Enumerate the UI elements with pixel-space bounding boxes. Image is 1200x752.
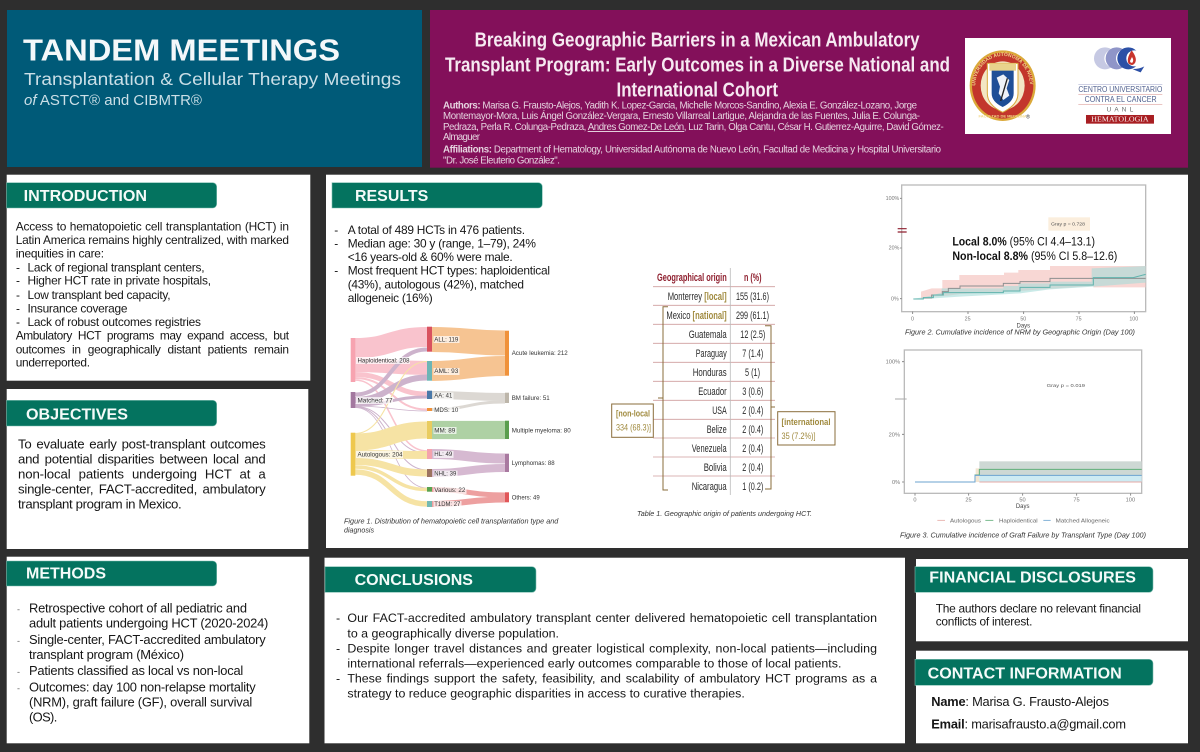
chart: figure 2 cumulative incidence of NRM: Figure 2. Cumulative incidence of NRM by Geographic Origin (Day 100) (905, 327, 1135, 336)
chart: figure 3 cumulative incidence of graft failure: 50 (1019, 498, 1026, 504)
heading: methods (6, 561, 217, 586)
table: geographic origin: 7 (1.4) (742, 348, 763, 360)
text: introduction body: inequities in care: (16, 247, 104, 261)
title: International Cohort (616, 80, 778, 102)
table: geographic origin: Paraguay (696, 348, 727, 360)
subheading: societies: of ASTCT® and CIBMTR® (24, 93, 202, 109)
callout: non-local bracket: [non-local (616, 409, 650, 420)
text: methods list: - (17, 683, 20, 693)
chart: sankey of transplant type and diagnosis: AML: 93 (434, 368, 459, 375)
text: methods list: - (17, 636, 20, 646)
table: geographic origin: Mexico [national] (666, 310, 727, 322)
panel: financial disclosures (915, 559, 1188, 641)
affiliations: Affiliations: Department of Hematology, Universidad Autónoma de Nuevo León, Facultad de Medicina y Hospital Universitario (443, 145, 941, 156)
icon: cancer center logo: HEMATOLOGIA (1091, 115, 1149, 124)
icon: university seal: UNIVERSIDAD AUTÓNOMA DE NUEVO LEÓN (972, 52, 1034, 86)
text: introduction body: Latin America remains highly centralized, with marked (16, 233, 289, 247)
legend: transplant type (937, 518, 1110, 524)
heading: conclusions (325, 567, 536, 592)
text: conclusions list (336, 611, 877, 700)
chart: figure 2 cumulative incidence of NRM: Local 8.0% (95% CI 4.4–13.1) (952, 235, 1095, 249)
text: conclusions list: to a geographically diverse population. (347, 627, 559, 641)
text: methods list: (NRM), graft failure (GF), overall survival (29, 695, 252, 710)
chart: sankey of transplant type and diagnosis: AA: 41 (434, 392, 453, 400)
icon: university seal: ® (1026, 113, 1030, 120)
authors (443, 100, 944, 143)
chart: sankey of transplant type and diagnosis (351, 327, 571, 508)
text: introduction body: Access to hematopoietic cell transplantation (HCT) in (16, 220, 289, 234)
panel: title and authors (430, 10, 1188, 168)
chart: figure 3 cumulative incidence of graft failure: Days (1016, 504, 1029, 510)
text: results summary: - (334, 236, 338, 250)
text: results summary: Median age: 30 y (range, 1–79), 24% (348, 236, 536, 250)
table: geographic origin: 1 (0.2) (742, 481, 763, 493)
chart: figure 3 cumulative incidence of graft failure: 100% (886, 360, 900, 366)
text: introduction body: - (16, 301, 20, 315)
callout: international bracket (765, 326, 835, 489)
chart: figure 3 cumulative incidence of graft failure (886, 350, 1146, 539)
affiliations: "Dr. José Eleuterio González". (443, 155, 560, 166)
text: contact details: Email: marisafrausto.a@gmail.com (931, 716, 1126, 731)
table: geographic origin: Bolivia (704, 462, 727, 474)
text: introduction body: Lack of robust outcomes registries (28, 315, 201, 329)
chart: sankey of transplant type and diagnosis: T1DM: 27 (434, 501, 461, 508)
heading: contact information: CONTACT INFORMATION (928, 665, 1122, 682)
chart: figure 2 cumulative incidence of NRM: Gray p = 0.728 (1051, 222, 1085, 227)
chart: sankey of transplant type and diagnosis: Autologous: 204 (358, 451, 403, 458)
panel: introduction (6, 175, 310, 381)
chart: figure 2 cumulative incidence of NRM: 50 (1020, 317, 1026, 323)
callout: international bracket: [international (782, 417, 830, 428)
title: Breaking Geographic Barriers in a Mexican Ambulatory (475, 30, 920, 52)
panel: results (326, 175, 1188, 548)
chart: sankey of transplant type and diagnosis: Others: 49 (512, 495, 540, 502)
text: introduction body: outcomes in geographically distant patients remain (16, 342, 289, 356)
text: methods list: Patients classified as local vs non-local (29, 663, 243, 678)
authors: Pedraza, Perla R. Colunga-Pedraza, Andres Gomez-De León, Luz Tarin, Olga Cantu, César H. Gutierrez-Aguirre, David Gómez- (443, 122, 944, 133)
chart: figure 2 cumulative incidence of NRM: Days (1017, 323, 1030, 329)
callout: non-local bracket: 334 (68.3)] (616, 423, 651, 434)
chart: sankey of transplant type and diagnosis: Multiple myeloma: 80 (512, 427, 571, 434)
text: contact details (931, 694, 1126, 731)
chart: sankey of transplant type and diagnosis: Matched: 77 (358, 397, 393, 404)
authors: Authors: Marisa G. Frausto-Alejos, Yadith K. Lopez-Garcia, Michelle Morcos-Sandino, Alexia E. González-Lozano, Jorge (443, 100, 917, 111)
heading: financial disclosures (915, 567, 1153, 592)
text: conclusions list: strategy to reduce geographic disparities in access to curative therapies. (347, 686, 745, 700)
subheading: meetings name: Transplantation & Cellular Therapy Meetings (24, 69, 401, 89)
text: methods list: transplant program (México) (29, 647, 184, 662)
affiliations (443, 145, 941, 166)
panel: objectives (6, 389, 308, 549)
text: introduction body (16, 220, 290, 370)
chart: figure 3 cumulative incidence of graft failure: 0% (892, 480, 900, 486)
text: objectives body: To evaluate early post-transplant outcomes (18, 437, 266, 452)
chart: figure 2 cumulative incidence of NRM: 75 (1076, 317, 1082, 323)
heading: financial disclosures: FINANCIAL DISCLOSURES (929, 569, 1136, 586)
text: results summary: - (334, 223, 338, 237)
icon: cancer center logo: U A N L (1107, 107, 1134, 114)
chart: figure 3 cumulative incidence of graft failure: 0 (913, 498, 916, 504)
panel: methods (6, 557, 309, 743)
table: geographic origin: Venezuela (692, 443, 727, 455)
chart: figure 2 cumulative incidence of NRM: 20% (889, 246, 900, 252)
heading: conclusions: CONCLUSIONS (355, 572, 473, 589)
chart: figure 2 cumulative incidence of NRM: 100% (886, 196, 900, 202)
table: geographic origin: 2 (0.4) (742, 462, 763, 474)
text: results summary: <16 years-old & 60% were male. (348, 250, 513, 264)
legend: transplant type: Matched Allogeneic (1056, 518, 1110, 524)
chart: sankey of transplant type and diagnosis: Lymphomas: 88 (512, 460, 555, 467)
heading: Tandem Meetings: TANDEM MEETINGS (23, 34, 340, 68)
table: geographic origin: 2 (0.4) (742, 443, 763, 455)
text: introduction body: underreported. (16, 356, 90, 370)
chart: figure 3 cumulative incidence of graft failure: 100 (1126, 498, 1135, 504)
table: geographic origin (612, 268, 835, 495)
text: introduction body: - (16, 261, 20, 275)
text: introduction body: - (16, 315, 20, 329)
panel: conclusions (324, 558, 905, 743)
table: geographic origin: Geographical origin (657, 272, 727, 284)
icon: cancer center logo: CONTRA EL CANCER (1085, 94, 1157, 104)
text: objectives body (18, 437, 266, 512)
text: results summary: - (334, 264, 338, 278)
chart: sankey of transplant type and diagnosis: NHL: 39 (434, 470, 457, 478)
chart: sankey of transplant type and diagnosis: HL: 49 (434, 451, 453, 458)
table: geographic origin: 12 (2.5) (740, 329, 765, 341)
caption: figure 1: diagnosis (344, 525, 374, 534)
table: geographic origin: 5 (1) (745, 367, 760, 379)
text: conclusions list: Our FACT-accredited ambulatory transplant center delivered hematopoietic cell transplantation (347, 611, 877, 625)
icon: university seal: FACULTAD DE MEDICINA (978, 113, 1027, 118)
text: introduction body: Lack of regional transplant centers, (28, 261, 204, 275)
table: geographic origin: Ecuador (698, 386, 727, 398)
text: introduction body: Higher HCT rate in private hospitals, (28, 274, 211, 288)
text: results summary (334, 223, 550, 305)
chart: figure 2 cumulative incidence of NRM: 25 (965, 317, 971, 323)
table: geographic origin: 2 (0.4) (742, 424, 763, 436)
text: objectives body: single-center, FACT-accredited, ambulatory (18, 482, 266, 497)
table: geographic origin: Guatemala (689, 329, 727, 341)
text: contact details: Name: Marisa G. Frausto-Alejos (931, 694, 1109, 709)
heading: objectives (6, 400, 217, 426)
chart: figure 3 cumulative incidence of graft failure: Figure 3. Cumulative incidence of Graft Failure by Transplant Type (Day 100) (900, 530, 1146, 539)
text: methods list: Single-center, FACT-accredited ambulatory (29, 632, 266, 647)
table: geographic origin: 3 (0.6) (742, 386, 763, 398)
chart: sankey of transplant type and diagnosis: ALL: 119 (434, 336, 459, 343)
chart: figure 2 cumulative incidence of NRM (886, 185, 1146, 336)
chart: figure 2 cumulative incidence of NRM: 100 (1129, 317, 1138, 323)
table: geographic origin: USA (712, 405, 727, 417)
text: methods list: (OS). (29, 710, 57, 725)
callout: non-local bracket (612, 307, 668, 490)
text: methods list: Outcomes: day 100 non-relapse mortality (29, 679, 256, 694)
table: geographic origin: 299 (61.1) (736, 310, 769, 322)
caption: figure 1 (344, 516, 559, 534)
text: disclosure statement (936, 602, 1141, 629)
heading: methods: METHODS (26, 565, 106, 582)
table: geographic origin: Nicaragua (692, 481, 727, 493)
chart: sankey of transplant type and diagnosis: BM failure: 51 (512, 395, 550, 402)
text: results summary: Most frequent HCT types: haploidentical (348, 264, 550, 278)
text: introduction body: Low transplant bed capacity, (28, 288, 170, 302)
text: results summary: A total of 489 HCTs in 476 patients. (348, 223, 525, 237)
text: methods list: - (17, 667, 20, 677)
icon: university seal (970, 50, 1036, 121)
heading: contact information (915, 659, 1153, 685)
table: geographic origin: 2 (0.4) (742, 405, 763, 417)
table: geographic origin: 155 (31.6) (736, 291, 769, 303)
caption: table 1: Table 1. Geographic origin of patients undergoing HCT. (637, 509, 812, 518)
legend: transplant type: Haploidentical (999, 518, 1038, 524)
panel: institutional logos (965, 38, 1171, 134)
caption: figure 1: Figure 1. Distribution of hematopoietic cell transplantation type and (344, 516, 559, 525)
chart: figure 3 cumulative incidence of graft failure: 25 (965, 498, 972, 504)
authors: Almaguer (443, 132, 481, 143)
chart: sankey of transplant type and diagnosis: Various: 22 (434, 487, 466, 494)
icon: cancer center logo: CENTRO UNIVERSITARIO (1078, 84, 1163, 94)
text: conclusions list: international referrals—experienced early outcomes comparable to those of local patients. (347, 657, 841, 671)
text: objectives body: transplant program in Mexico. (18, 497, 182, 512)
chart: sankey of transplant type and diagnosis: Acute leukemia: 212 (512, 350, 568, 357)
callout: international bracket: 35 (7.2%)] (782, 431, 816, 442)
icon: cancer center logo (1078, 47, 1163, 124)
text: conclusions list: These findings support the safety, feasibility, and scalability of ambulatory HCT programs as a (347, 671, 877, 685)
chart: sankey of transplant type and diagnosis: MDS: 10 (434, 407, 459, 414)
text: objectives body: non-local patients undergoing HCT at a (18, 467, 266, 482)
text: disclosure statement: conflicts of interest. (936, 615, 1032, 629)
text: conclusions list: Despite longer travel distances and greater logistical complexity, non-local patients—including (347, 642, 877, 656)
text: methods list: Retrospective cohort of all pediatric and (29, 600, 247, 615)
heading: results (332, 183, 542, 208)
text: methods list: adult patients undergoing HCT (2020-2024) (29, 615, 268, 630)
chart: figure 2 cumulative incidence of NRM: Non-local 8.8% (95% CI 5.8–12.6) (952, 249, 1117, 263)
text: conclusions list: - (336, 642, 340, 656)
chart: figure 2 cumulative incidence of NRM: 0% (891, 296, 899, 302)
text: introduction body: Insurance coverage (28, 301, 128, 315)
panel: conference banner (7, 10, 422, 167)
text: results summary: allogeneic (16%) (348, 291, 433, 305)
text: introduction body: - (16, 274, 20, 288)
chart: sankey of transplant type and diagnosis: MM: 89 (434, 427, 456, 434)
authors: Montemayor-Mora, Luis Ángel González-Vergara, Ernesto Villarreal Lartigue, Alejandra de las Fuentes, Julia E. Colunga- (443, 111, 920, 122)
text: conclusions list: - (336, 671, 340, 685)
chart: figure 3 cumulative incidence of graft failure: 75 (1073, 498, 1080, 504)
text: methods list (17, 600, 268, 725)
heading: results: RESULTS (355, 188, 429, 205)
panel: contact information (915, 651, 1188, 743)
table: geographic origin: Honduras (693, 367, 727, 379)
text: introduction body: Ambulatory HCT programs may expand access, but (16, 329, 290, 343)
chart: figure 2 cumulative incidence of NRM: 0 (911, 317, 914, 323)
text: disclosure statement: The authors declare no relevant financial (936, 602, 1141, 616)
legend: transplant type: Autologous (950, 518, 981, 524)
text: results summary: (43%), autologous (42%), matched (348, 277, 524, 291)
table: geographic origin: n (%) (744, 272, 762, 284)
heading: introduction: INTRODUCTION (24, 188, 147, 205)
table: geographic origin: Monterrey [local] (668, 291, 727, 303)
heading: introduction (6, 183, 217, 208)
title (445, 30, 950, 102)
heading: objectives: OBJECTIVES (26, 407, 128, 424)
text: introduction body: - (16, 288, 20, 302)
table: geographic origin: Belize (707, 424, 727, 436)
title: Transplant Program: Early Outcomes in a Diverse National and (445, 55, 950, 77)
chart: figure 3 cumulative incidence of graft failure: Gray p = 0.019 (1047, 383, 1085, 389)
chart: figure 3 cumulative incidence of graft failure: 20% (889, 432, 900, 438)
chart: sankey of transplant type and diagnosis: Haploidentical: 208 (358, 358, 410, 365)
text: conclusions list: - (336, 611, 340, 625)
text: objectives body: and potential disparities between local and (18, 452, 266, 467)
text: methods list: - (17, 604, 20, 614)
